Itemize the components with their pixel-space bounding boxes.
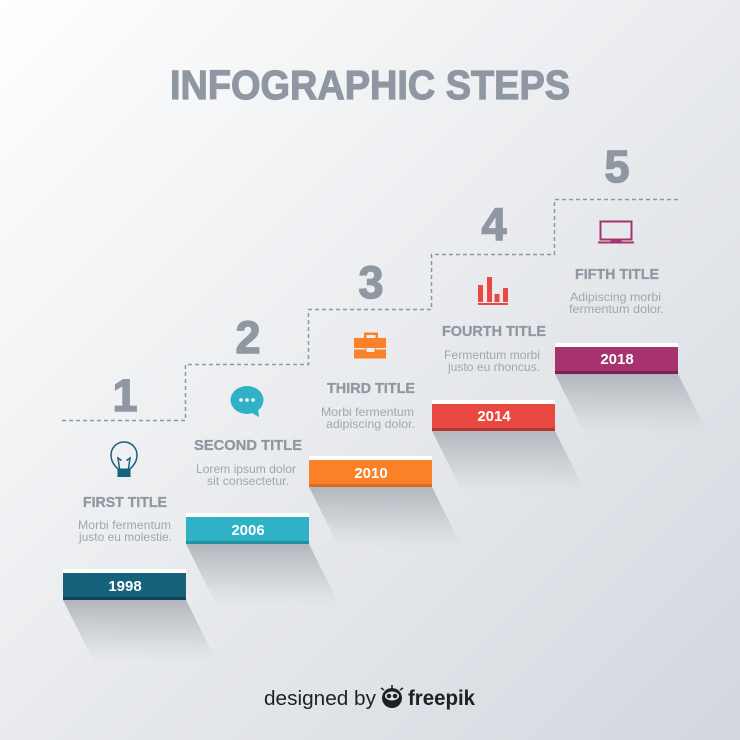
number 3: 3 [358, 257, 384, 308]
footer credit: freepik [408, 687, 475, 710]
number 5: 5 [604, 141, 630, 192]
footer credit: designed by [264, 688, 376, 710]
bar 1998: 1998 [108, 578, 142, 595]
step 2 [186, 312, 341, 608]
bar 2014 [432, 400, 555, 431]
description 5: Adipiscing morbi [570, 290, 661, 304]
shadow 4 [432, 431, 587, 495]
icon: light bulb [111, 442, 137, 477]
bar 2018 [555, 343, 678, 374]
bar 2006 [186, 513, 309, 544]
shadow 1 [63, 600, 218, 664]
step 1 [63, 370, 218, 664]
description 2: sit consectetur. [207, 474, 289, 488]
icon: laptop [598, 222, 634, 242]
icon: speech bubble [230, 386, 264, 417]
bar 2018: 2018 [600, 351, 634, 368]
icon: freepik mascot [381, 685, 403, 708]
bar 2010 [309, 456, 432, 487]
description 3: Morbi fermentum [321, 405, 414, 419]
step 4 [432, 199, 587, 495]
description 4: justo eu rhoncus. [447, 360, 540, 374]
description 1: Morbi fermentum [78, 518, 171, 532]
description 5: fermentum dolor. [569, 302, 664, 316]
number 1: 1 [112, 370, 138, 421]
step 5 [555, 141, 710, 438]
heading 4: FOURTH TITLE [442, 323, 546, 340]
title: INFOGRAPHIC STEPS [170, 62, 570, 108]
bar 2014: 2014 [477, 408, 511, 425]
heading 2: SECOND TITLE [194, 437, 302, 454]
description 2: Lorem ipsum dolor [196, 462, 296, 476]
description 3: adipiscing dolor. [326, 417, 415, 431]
shadow 3 [309, 487, 464, 551]
icon: briefcase [354, 332, 386, 358]
bar 1998 [63, 569, 186, 600]
description 1: justo eu molestie. [78, 530, 172, 544]
heading 3: THIRD TITLE [327, 380, 415, 397]
icon: bar chart [478, 277, 508, 305]
description 4: Fermentum morbi [444, 348, 540, 362]
bar 2010: 2010 [354, 465, 388, 482]
bar 2006: 2006 [231, 522, 265, 539]
shadow 5 [555, 374, 710, 438]
heading 1: FIRST TITLE [83, 494, 167, 511]
step 3 [309, 257, 464, 551]
footer credit [264, 685, 475, 710]
heading 5: FIFTH TITLE [575, 266, 659, 283]
number 4: 4 [481, 199, 507, 250]
shadow 2 [186, 544, 341, 608]
dashed stair line [62, 200, 678, 420]
number 2: 2 [235, 312, 261, 363]
